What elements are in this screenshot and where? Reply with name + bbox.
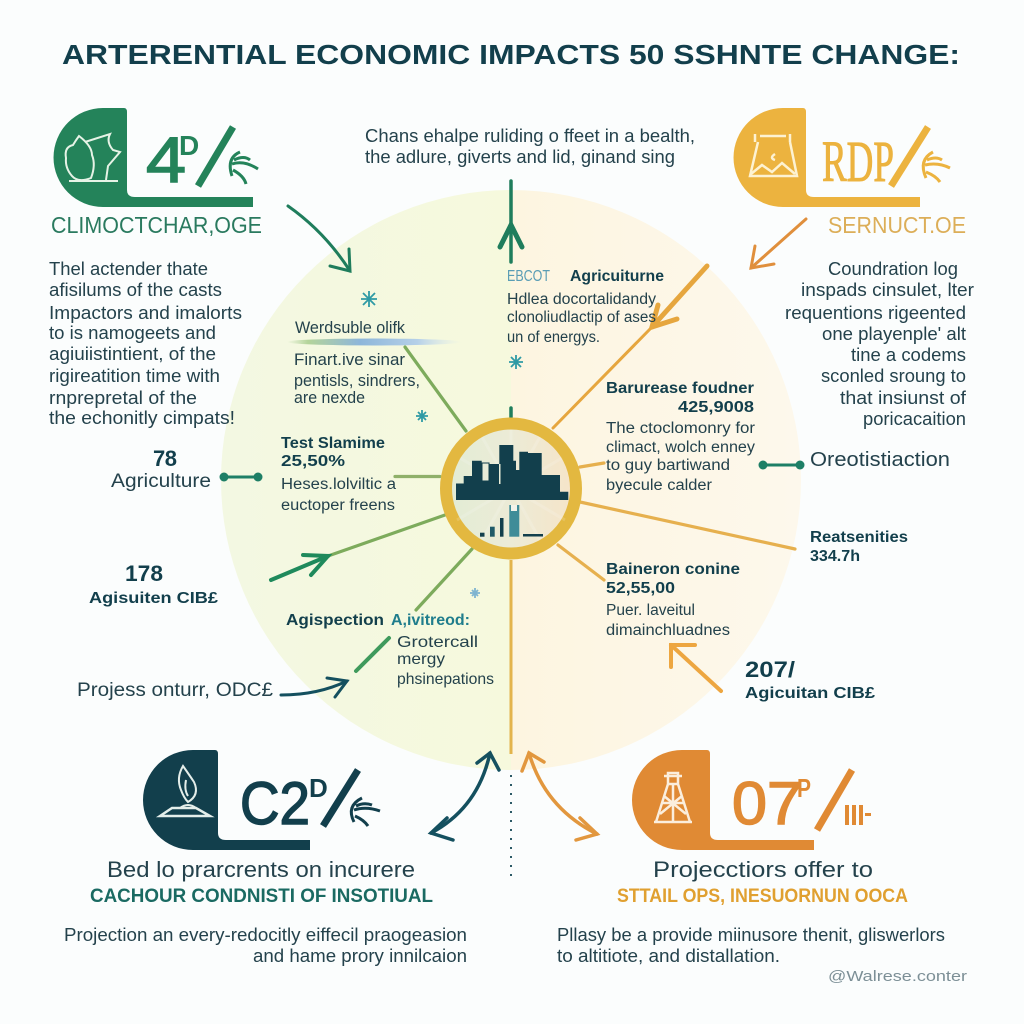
disc text: werdsuble: pentisls, sindrers, <box>294 372 420 390</box>
left text block <box>49 259 242 428</box>
callout: oreotistiaction: Oreotistiaction <box>810 449 950 471</box>
arrow: long diagonal to medallion <box>553 266 707 428</box>
top text block <box>365 126 695 167</box>
icon: landscape frame <box>750 134 797 176</box>
disc text: test slamime: Heses.lolviltic a <box>281 476 396 493</box>
callout: 178: Agisuiten CIB£ <box>89 590 218 607</box>
callout: projess: Projess onturr, ODC£ <box>77 680 273 701</box>
bottom left text: Projection an every-redocitly eiffecil praogeasion <box>64 925 467 945</box>
bottom right text: Projecctiors offer to <box>653 857 873 882</box>
bottom right text: STTAIL OPS, INESUORNUN OOCA <box>617 886 908 907</box>
bottom left text <box>64 857 467 966</box>
icon: oil derrick <box>654 773 692 822</box>
disc text: barurease: to guy bartiwand <box>606 457 730 474</box>
right text block: inspads cinsulet, lter <box>801 280 974 300</box>
icon: sparkle stars <box>361 291 523 598</box>
percent slash <box>891 127 928 186</box>
icon: flame burner <box>160 766 210 816</box>
value: 07 <box>732 770 802 837</box>
callout: 78 agriculture: Agriculture <box>111 471 211 492</box>
right text block: one playenple' alt <box>822 324 966 344</box>
bottom left text: Bed lo prarcrents on incurere <box>107 857 415 882</box>
bars mark <box>845 805 871 825</box>
icon: tree <box>66 134 120 181</box>
disc text: agriculture: Hdlea docortalidandy <box>507 291 656 308</box>
disc text: werdsuble <box>287 318 461 407</box>
connector spokes <box>328 347 795 671</box>
disc text: baineron <box>606 561 740 639</box>
disc text: werdsuble: Werdsuble olifk <box>295 318 405 337</box>
value: RDP <box>822 129 894 194</box>
left text block: afisilums of the casts <box>49 280 222 300</box>
arrow: projess <box>281 678 347 697</box>
bottom right text <box>557 857 945 966</box>
right text block: that insiunst of <box>840 388 967 408</box>
callout: reatsenities: 334.7h <box>810 548 860 565</box>
value: C2 <box>240 770 310 837</box>
right text block: tine a codems <box>851 345 966 365</box>
disc text: test slamime: Test Slamime <box>281 435 385 452</box>
disc text: agispection: phsinepations <box>397 671 494 688</box>
right text block: Coundration log <box>828 259 958 279</box>
bottom divider line <box>510 560 512 882</box>
percent slash <box>817 770 852 830</box>
disc text: barurease: The ctoclomonry for <box>606 420 755 437</box>
panel: orange badge <box>632 750 871 850</box>
disc text: baineron: Baineron conine <box>606 561 740 578</box>
callout: 207 <box>745 657 875 702</box>
percent slash <box>198 127 233 186</box>
arrow: bottom right double-headed <box>522 753 597 840</box>
icon: leaf swirl <box>230 152 258 184</box>
right text block: requentions rigeented <box>785 303 966 323</box>
disc text: agispection: Agispection <box>286 612 384 629</box>
callout: 78 agriculture <box>111 446 211 492</box>
disc text: baineron: dimainchluadnes <box>606 622 730 639</box>
disc text: agispection: Grotercall <box>397 634 478 651</box>
disc text: agispection <box>286 612 494 688</box>
badge shape <box>632 750 814 850</box>
icon: leaf swirl <box>923 152 950 182</box>
callout: 207: Agicuitan CIB£ <box>745 685 875 702</box>
arrow: top vertical <box>500 181 522 417</box>
disc text: werdsuble: are nexde <box>294 389 365 407</box>
arrow: lower right orange <box>671 645 721 691</box>
left text block: Impactors and imalorts <box>49 303 242 323</box>
bottom right text: to altitiote, and distallation. <box>557 946 780 966</box>
panel: teal badge: D <box>309 773 328 803</box>
disc text: baineron: 52,55,00 <box>606 580 675 597</box>
left text block: agiuiistintient, of the <box>49 344 216 364</box>
callout: 78 agriculture: 78 <box>153 446 177 471</box>
disc text: werdsuble: Finart.ive sinar <box>294 351 406 369</box>
value: 4 <box>146 124 186 196</box>
left text block: Thel actender thate <box>49 259 208 279</box>
label: SERNUCT.OE <box>828 212 966 238</box>
top text block: Chans ehalpe ruliding o ffeet in a bealth, <box>365 126 695 146</box>
right text block <box>785 259 974 429</box>
label: CLIMOCTCHAR,OGE <box>51 212 262 238</box>
disc text: baineron: Puer. laveitul <box>606 602 695 619</box>
right text block: sconled sroung to <box>821 366 966 386</box>
title: ARTERENTIAL ECONOMIC IMPACTS 50 SSHNTE CHANGE: <box>62 39 960 70</box>
left text block: rigireatition time with <box>49 366 220 386</box>
disc text: barurease: 425,9008 <box>678 399 754 416</box>
panel: climate green badge <box>51 108 262 238</box>
arrow: top right orange <box>751 219 806 268</box>
connector: right dots <box>758 460 804 470</box>
bottom left text: and hame prory innilcaion <box>253 946 467 966</box>
bottom right text: Pllasy be a provide miinusore thenit, gliswerlors <box>557 925 945 945</box>
panel: climate green badge: D <box>179 130 199 161</box>
badge shape <box>734 108 920 207</box>
callout: reatsenities: Reatsenities <box>810 529 908 546</box>
panel: orange badge: P <box>797 773 811 803</box>
panel: gold badge <box>734 108 966 238</box>
bottom left text: CACHOUR CONDNISTI OF INSOTIUAL <box>90 886 433 907</box>
left text block: the echonitly cimpats! <box>49 408 235 428</box>
disc text: agispection: A,ivitreod: <box>391 612 470 629</box>
disc text: barurease <box>606 380 755 494</box>
disc text: test slamime <box>281 435 396 514</box>
disc text: agriculture: clonoliudlactip of ases <box>507 309 656 326</box>
percent slash <box>323 770 358 826</box>
icon: leaf swirl <box>351 798 380 826</box>
disc text: agriculture: un of energys. <box>507 329 600 346</box>
left text block: to is namogeets and <box>49 323 216 343</box>
credit: @Walrese.conter <box>828 968 967 985</box>
callout: reatsenities <box>810 529 908 565</box>
arrow: top left green <box>288 206 350 271</box>
medallion: city skyline <box>446 424 576 554</box>
arrow: left lower spoke <box>271 555 328 580</box>
disc text: barurease: byecule calder <box>606 477 712 494</box>
callout: 178 <box>89 561 218 607</box>
callout: 178: 178 <box>125 561 163 586</box>
disc text: test slamime: euctoper freens <box>281 497 395 514</box>
right text block: poricacaition <box>863 409 966 429</box>
connector: left dots <box>220 472 262 482</box>
disc text: agriculture <box>507 268 664 346</box>
top text block: the adlure, giverts and lid, ginand sing <box>365 147 675 167</box>
badge shape <box>54 108 253 207</box>
disc text: agispection: mergy <box>397 651 445 668</box>
arrow: bottom left double-headed <box>431 753 499 840</box>
disc text: barurease: climact, wolch enney <box>606 439 755 456</box>
disc text: agriculture: Agricuiturne <box>570 268 664 285</box>
panel: teal badge <box>143 750 380 850</box>
disc text: barurease: Barurease foudner <box>606 380 754 397</box>
callout: 207: 207/ <box>745 657 795 682</box>
disc text: agriculture: EBCOT <box>507 268 550 285</box>
central disc background <box>221 190 801 770</box>
badge shape <box>143 750 310 850</box>
left text block: rnprepretal of the <box>49 388 197 408</box>
disc text: test slamime: 25,50% <box>281 453 345 470</box>
